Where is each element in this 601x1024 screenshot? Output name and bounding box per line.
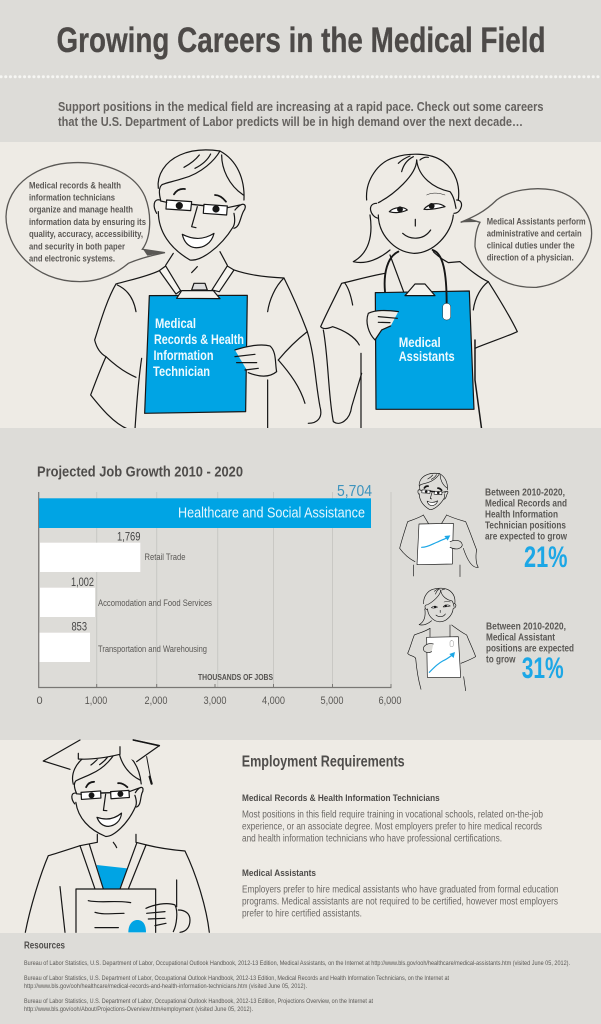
clipboard: white sheet <box>417 523 453 565</box>
axis labels: 2,000 <box>144 695 168 707</box>
clipboard label: technician: Medical <box>155 316 196 331</box>
text block: technician requirements: Medical Records & Health Information Technicians <box>242 793 440 804</box>
growth callout: technician: Health Information <box>485 508 558 520</box>
diploma seal <box>128 920 146 932</box>
growth callout: technician: Medical Records and <box>485 497 567 509</box>
growth callout: assistant: positions are expected <box>486 642 574 654</box>
clipboard label: technician <box>153 316 244 379</box>
bar: transportation: Transportation and Warehousing <box>98 644 207 654</box>
clipboard label: assistants <box>399 335 455 364</box>
resources list: Bureau of Labor Statistics, U.S. Department of Labor, Occupational Outlook Handbook, 2012-13 Edition, Projections Overview, on the Internet at <box>24 998 373 1005</box>
axis labels: 3,000 <box>204 695 226 707</box>
bar chart: projected job growth <box>36 483 402 707</box>
growth callout: assistant: Medical Assistant <box>486 631 555 643</box>
text block: technician requirements <box>242 793 543 845</box>
dotted divider <box>1 75 601 78</box>
panel: resources background <box>0 933 601 1024</box>
chart heading: Projected Job Growth 2010 - 2020 <box>37 464 243 480</box>
axis title: THOUSANDS OF JOBS <box>198 672 273 682</box>
bar: retail <box>40 532 186 572</box>
figure: graduate with diploma <box>25 740 209 932</box>
heading: employment requirements: Employment Requirements <box>242 754 405 771</box>
speech bubble: records technicians: organize and manage health <box>29 205 133 216</box>
speech bubble: medical assistants: administrative and certain <box>487 228 582 240</box>
axis labels: 1,000 <box>85 695 107 707</box>
diploma <box>76 889 156 932</box>
bar: accommodation: Accomodation and Food Services <box>98 598 212 608</box>
stethoscope <box>385 250 451 320</box>
bar: accommodation: 1,002 <box>71 577 94 589</box>
bar: transportation: 853 <box>72 622 87 634</box>
figure: medical records technician <box>91 150 321 429</box>
panel: employment background <box>0 740 601 933</box>
intro text <box>58 100 544 129</box>
clipboard: assistant <box>375 291 474 409</box>
growth callout: assistant: 31% <box>522 652 564 685</box>
mini figure: assistant with growth chart <box>408 588 476 691</box>
growth callout: technician: Between 2010-2020, <box>485 486 565 498</box>
resources list: Bureau of Labor Statistics, U.S. Department of Labor, Occupational Outlook Handbook, 2012-13 Edition, Medical Records and Health Information Technicians, on the Internet at <box>24 975 449 982</box>
axis labels: 5,000 <box>320 695 344 707</box>
speech bubble: records technicians: quality, accuracy, accessibility, <box>29 229 143 240</box>
header background panel <box>0 0 601 142</box>
resources list: http://www.bls.gov/ooh/About/Projections-Overview.htm#employment (visited June 05, 2012). <box>24 1006 253 1013</box>
bar: retail: 1,769 <box>117 532 140 544</box>
bar: retail: Retail Trade <box>144 552 186 562</box>
growth callout: technician: Technician positions <box>485 519 566 531</box>
figure: medical assistant <box>321 154 517 429</box>
text block: assistant requirements: Medical Assistants <box>242 868 316 879</box>
speech bubble: medical assistants: clinical duties under the <box>487 240 575 252</box>
axis labels: 4,000 <box>262 695 285 707</box>
resources heading: Resources <box>24 941 65 952</box>
resources list <box>24 960 570 1013</box>
clipboard: white sheet <box>427 637 461 677</box>
clipboard label: technician: Technician <box>153 364 210 379</box>
text block: assistant requirements: prefer to hire certified assistants. <box>242 908 362 920</box>
text block: technician requirements: Most positions in this field require training in vocational schools, related on-the-job <box>242 810 543 821</box>
resources list: http://www.bls.gov/ooh/healthcare/medical-records-and-health-information-technicians.htm (visited June 05, 2012). <box>24 983 307 990</box>
growth callout: assistant: Between 2010-2020, <box>486 620 566 632</box>
clipboard: technician <box>145 295 247 413</box>
clipboard label: technician: Records & Health <box>154 332 244 347</box>
text block: technician requirements: and health information technicians who have professional certifications. <box>242 834 502 845</box>
text block: assistant requirements <box>242 868 558 920</box>
speech bubble: records technicians: and security in both paper <box>29 241 125 252</box>
clipboard label: assistants: Assistants <box>399 349 455 364</box>
bar: accommodation <box>40 577 212 617</box>
bar: transportation <box>40 622 207 662</box>
speech bubble: medical assistants: direction of a physician. <box>487 252 574 264</box>
speech bubble: records technicians: information data by ensuring its <box>29 217 146 228</box>
graduation cap <box>43 740 159 784</box>
clipboard label: technician: Information <box>154 348 214 363</box>
growth callout: technician: are expected to grow <box>485 530 568 542</box>
text block: technician requirements: experience, or an associate degree. Most employers prefer to hire medical records <box>242 822 542 833</box>
speech bubble: records technicians: information technicians <box>29 192 115 204</box>
growth callout: assistant: to grow <box>486 653 516 665</box>
speech bubble: medical assistants <box>461 189 592 287</box>
bar: healthcare <box>39 483 372 528</box>
panel: job growth background <box>0 428 601 740</box>
growth callout: technician: 21% <box>524 541 568 574</box>
growth callout: assistant <box>486 620 574 685</box>
arrow: growth <box>422 535 450 547</box>
arrow: growth <box>429 652 455 672</box>
speech bubble: records technicians: and electronic systems. <box>29 254 115 264</box>
intro text: Support positions in the medical field are increasing at a rapid pace. Check out some careers <box>58 100 544 114</box>
intro text: that the U.S. Department of Labor predicts will be in high demand over the next decade… <box>58 115 523 129</box>
speech bubble: records technicians <box>6 163 165 282</box>
mini figure: technician with growth chart <box>400 473 478 577</box>
axis labels: 0 <box>36 695 43 707</box>
growth callout: technician <box>485 486 568 574</box>
bar: healthcare: 5,704 <box>337 483 372 500</box>
bar: healthcare: Healthcare and Social Assistance <box>178 505 365 522</box>
axis labels <box>36 695 402 707</box>
panel: characters background <box>0 142 601 428</box>
axis labels: 6,000 <box>378 695 402 707</box>
clipboard label: assistants: Medical <box>399 335 441 350</box>
speech bubble: records technicians: Medical records & health <box>29 180 121 192</box>
